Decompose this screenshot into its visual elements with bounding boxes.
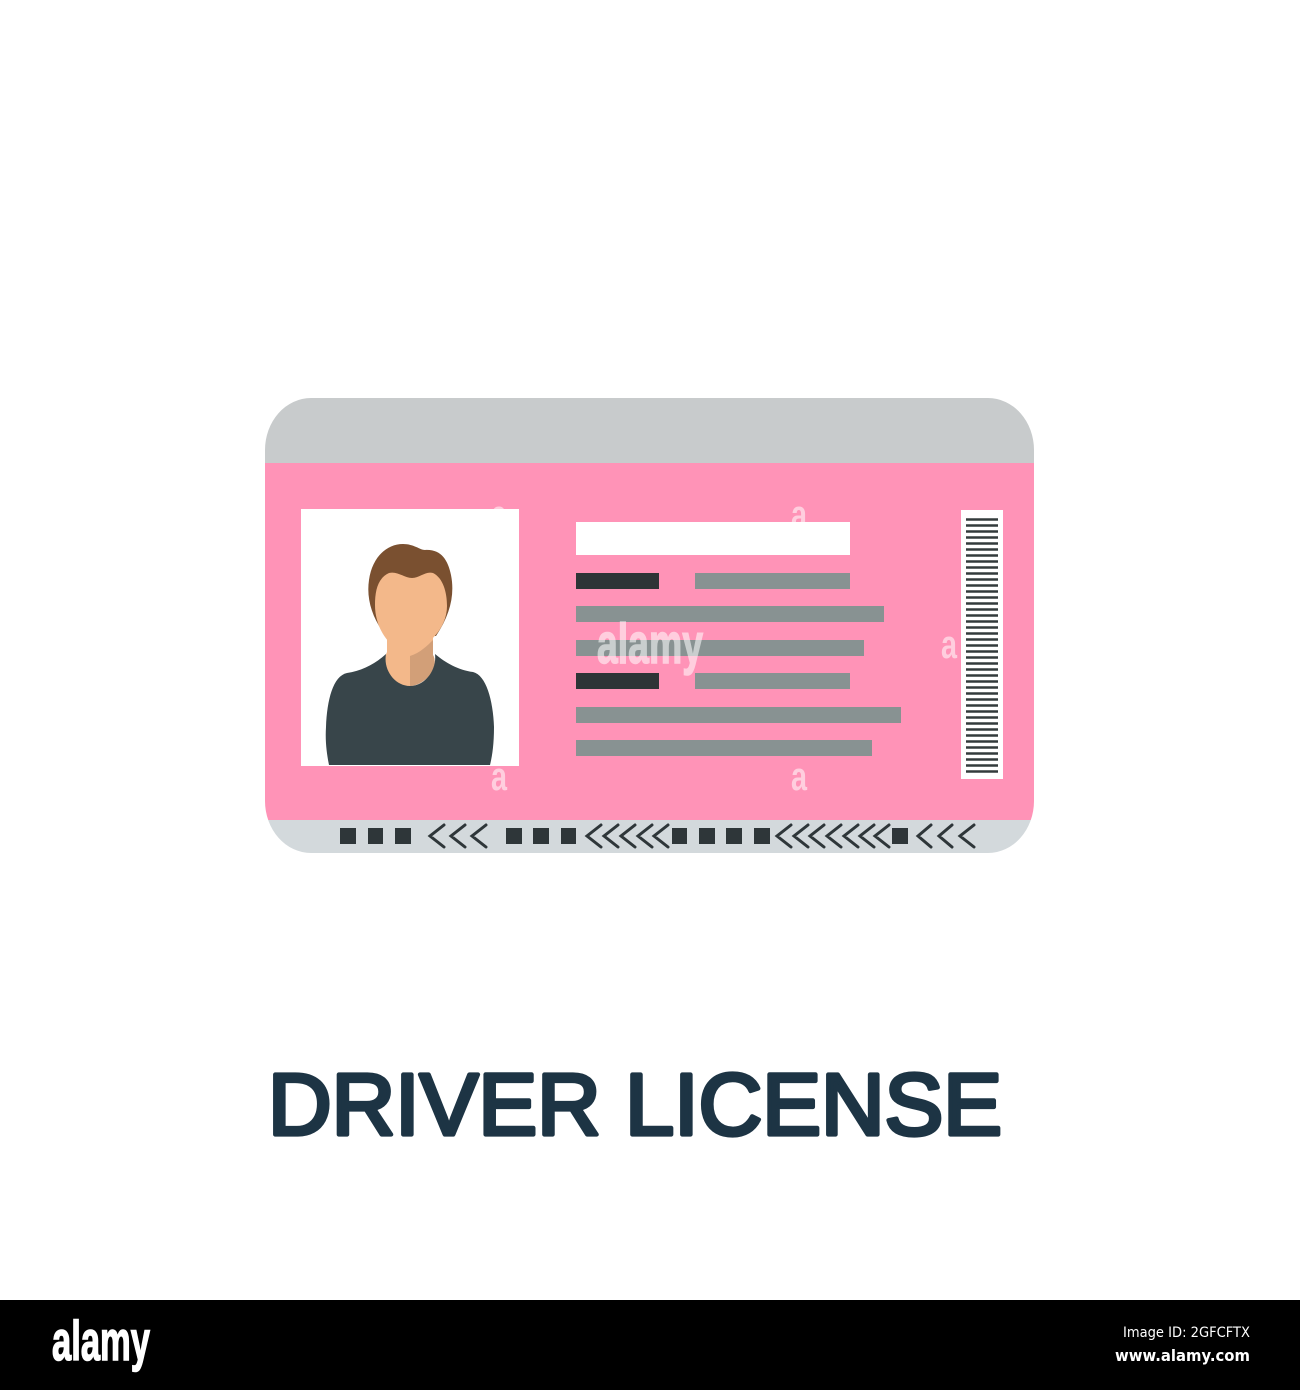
name field [576, 522, 850, 555]
watermark [491, 493, 958, 799]
watermark: a [791, 755, 808, 799]
watermark: alamy [597, 612, 703, 676]
driver license infographic [0, 398, 1300, 1390]
website: www.alamy.com [1115, 1346, 1250, 1365]
icon: face [375, 573, 447, 655]
footer logo: alamy [52, 1309, 150, 1372]
barcode [961, 510, 1003, 779]
icon: torso [326, 654, 494, 765]
machine readable strip [340, 825, 974, 847]
footer bar [0, 1300, 1300, 1390]
card body [265, 398, 1034, 853]
photo panel [301, 509, 519, 766]
icon: hair [368, 544, 452, 637]
icon: neck shadow [410, 640, 435, 686]
icon: license card [265, 398, 1034, 853]
watermark: a [491, 755, 508, 799]
text lines [576, 573, 901, 756]
watermark: a [941, 623, 958, 667]
watermark: a [491, 493, 508, 537]
image id: Image ID: 2GFCFTX [1123, 1325, 1250, 1341]
title: DRIVER LICENSE [268, 1056, 1002, 1153]
icon: neck [384, 630, 435, 686]
watermark: a [791, 493, 808, 537]
